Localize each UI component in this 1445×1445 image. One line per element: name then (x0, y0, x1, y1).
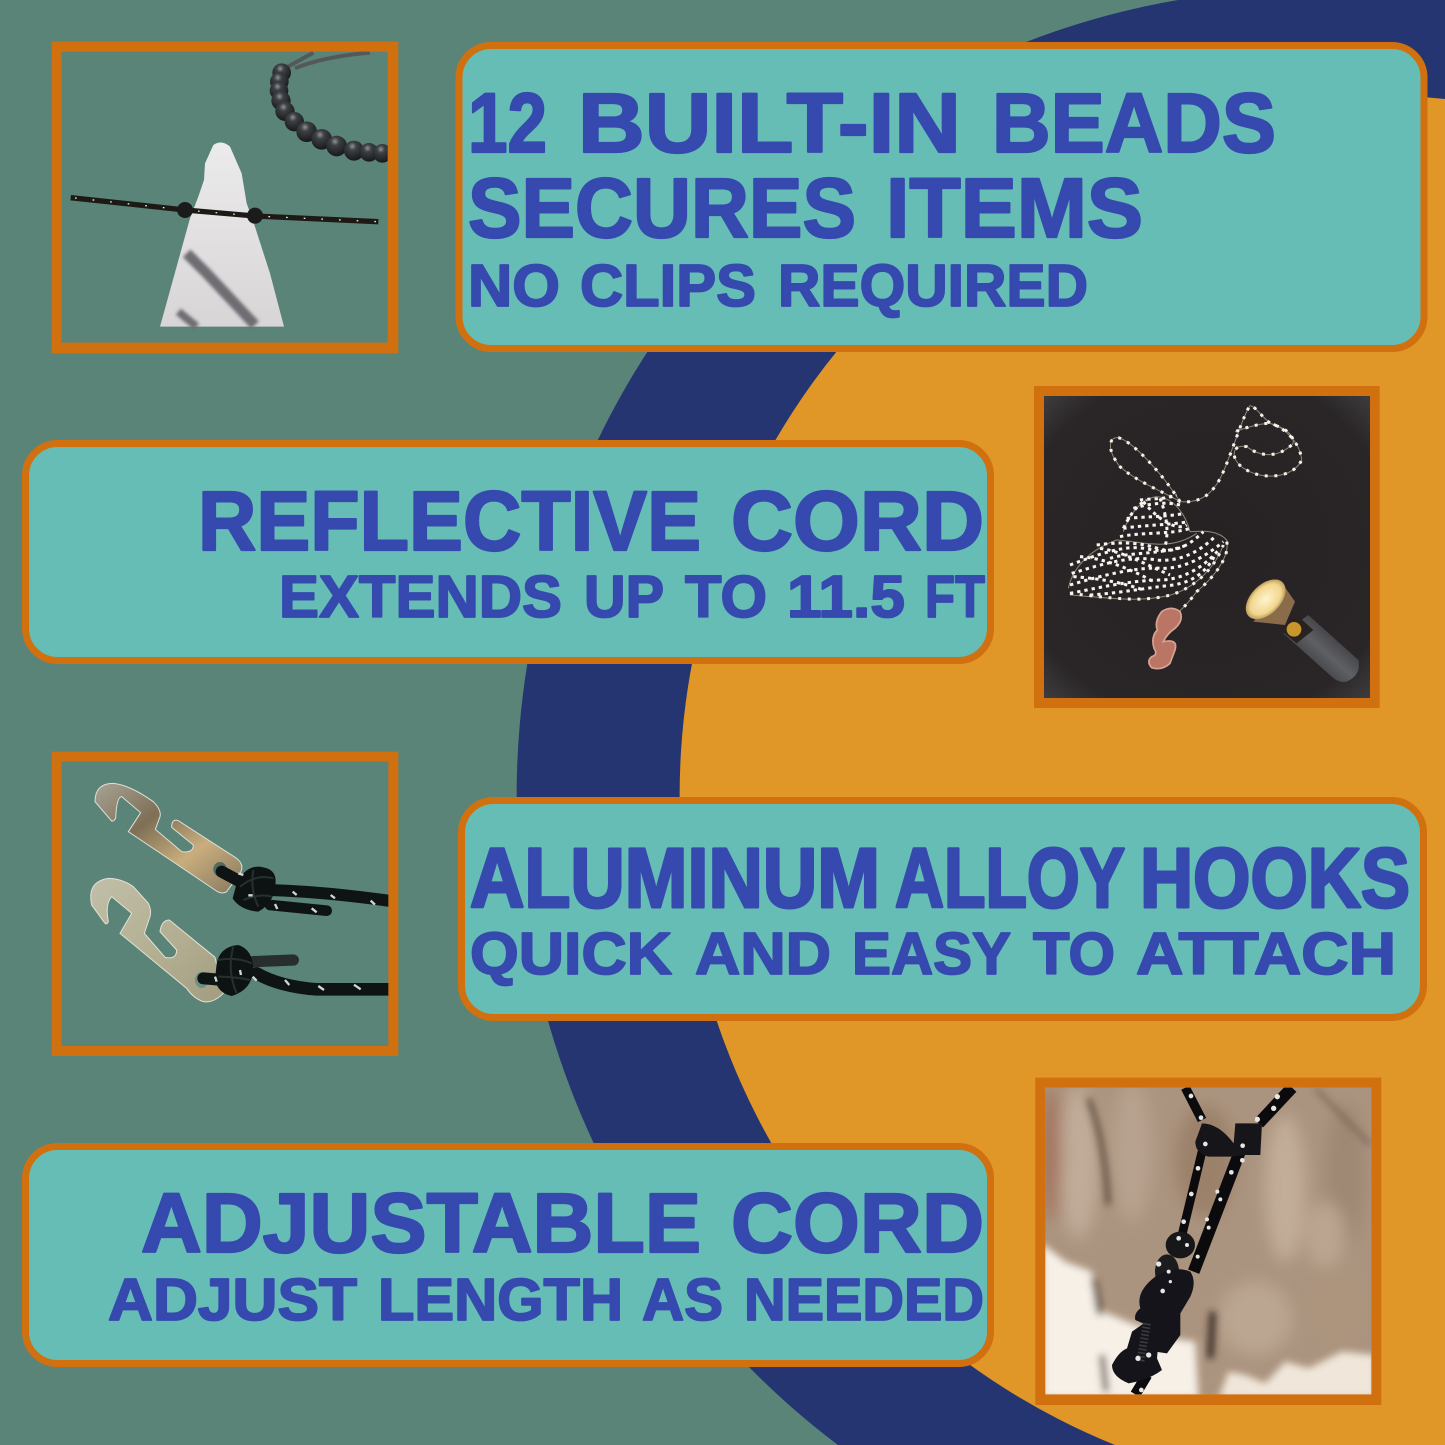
subheading: adjust length as needed: AS (642, 1267, 723, 1333)
subheading: no clips required (468, 253, 1088, 319)
subheading: adjust length as needed (108, 1267, 984, 1333)
heading: reflective cord (198, 474, 984, 568)
subheading: extends up to 11.5 ft: UP (584, 564, 664, 630)
subheading: extends up to 11.5 ft: 11.5 (787, 564, 905, 630)
bark and snow, blurred (1044, 1082, 1367, 1355)
panel: reflective cord (26, 444, 990, 660)
coiled cord, thin outline (1068, 406, 1302, 618)
heading: aluminum alloy hooks (470, 831, 1410, 925)
coiled cord, reflective flecks (1070, 406, 1302, 618)
subheading: quick and easy to attach: TO (1033, 921, 1115, 987)
towel (160, 143, 284, 327)
bead cord loop (287, 53, 370, 68)
background: orange circle (680, 95, 1445, 1445)
heading: aluminum alloy hooks: ALLOY (895, 831, 1125, 925)
photo: towel held by beaded cord (52, 42, 398, 353)
upper cord and knot (222, 872, 388, 911)
upper hook (95, 783, 242, 893)
heading: aluminum alloy hooks: HOOKS (1140, 831, 1410, 925)
subheading: extends up to 11.5 ft: TO (685, 564, 767, 630)
panel: adjustable cord (26, 1146, 990, 1364)
heading: reflective cord: CORD (731, 474, 984, 568)
heading: reflective cord: REFLECTIVE (198, 474, 701, 568)
subheading: no clips required: REQUIRED (778, 253, 1088, 319)
tensioner hook (1149, 608, 1181, 669)
cord with two beads (71, 198, 378, 222)
black hook tensioner (1135, 1269, 1194, 1353)
heading: secures items: ITEMS (886, 161, 1143, 255)
heading: secures items: SECURES (468, 161, 856, 255)
panel: aluminum alloy hooks (462, 800, 1424, 1018)
flashlight (1283, 615, 1359, 682)
cord flecks (215, 873, 375, 990)
photo: adjustable cord against tree bark (1035, 1078, 1381, 1405)
subheading: adjust length as needed: LENGTH (378, 1267, 623, 1333)
heading: secures items (468, 161, 1143, 255)
cord tensioner at top (1195, 1123, 1262, 1157)
subheading: extends up to 11.5 ft (279, 564, 985, 630)
subheading: adjust length as needed: NEEDED (744, 1267, 984, 1333)
lower cord and knot (203, 960, 388, 989)
background: navy circle (517, 0, 1445, 1445)
heading: 12 built-in beads (468, 76, 1276, 170)
subheading: quick and easy to attach (470, 921, 1396, 987)
heading: adjustable cord: ADJUSTABLE (141, 1176, 701, 1270)
cord pile (1070, 495, 1223, 595)
subheading: adjust length as needed: ADJUST (108, 1267, 357, 1333)
subheading: extends up to 11.5 ft: FT (925, 564, 985, 630)
subheading: quick and easy to attach: QUICK (470, 921, 672, 987)
photo: aluminum alloy hooks with knotted cords (52, 752, 398, 1056)
heading: 12 built-in beads: BEADS (992, 76, 1276, 170)
reflective dots (1135, 1094, 1280, 1392)
knot (1166, 1232, 1195, 1258)
heading: adjustable cord (141, 1176, 984, 1270)
heading: 12 built-in beads: 12 (468, 76, 547, 170)
subheading: quick and easy to attach: AND (695, 921, 831, 987)
subheading: no clips required: NO (468, 253, 560, 319)
heading: adjustable cord: CORD (731, 1176, 984, 1270)
photo: reflective cord in the dark with flashlight (1034, 386, 1380, 708)
heading: aluminum alloy hooks: ALUMINUM (470, 831, 880, 925)
subheading: no clips required: CLIPS (580, 253, 756, 319)
subheading: extends up to 11.5 ft: EXTENDS (279, 564, 562, 630)
panel: 12 built-in beads (459, 46, 1424, 348)
subheading: quick and easy to attach: ATTACH (1136, 921, 1396, 987)
lower hook (91, 878, 223, 1002)
cords (1135, 1088, 1292, 1394)
heading: 12 built-in beads: BUILT-IN (578, 76, 961, 170)
subheading: quick and easy to attach: EASY (852, 921, 1011, 987)
